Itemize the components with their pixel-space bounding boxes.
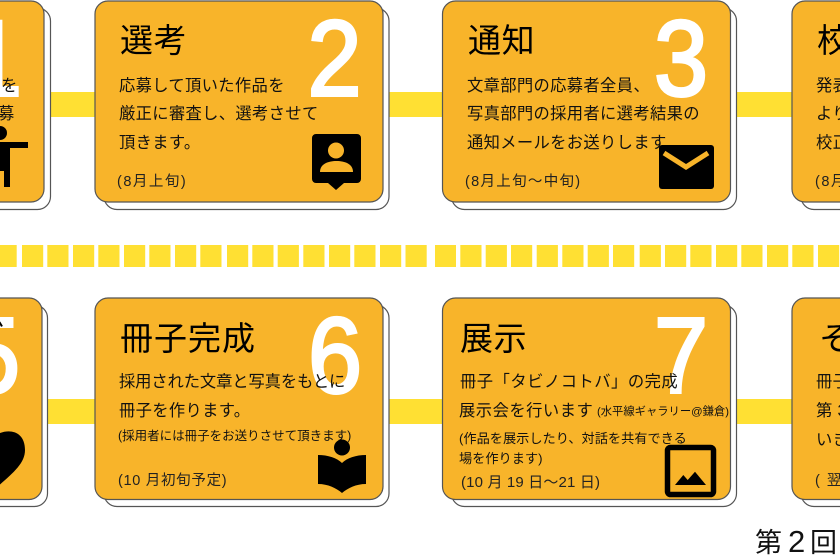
- date: (10 月 19 日〜21 日): [461, 474, 600, 491]
- heading: 冊子完成: [120, 320, 256, 357]
- body text: 文章部門の応募者全員、: [467, 77, 650, 95]
- body text: 採用された文章と写真をもとに: [119, 373, 345, 391]
- number 6: 6: [308, 295, 362, 416]
- body text fragments: を: [1, 77, 18, 95]
- body text: 厳正に審査し、選考させて: [119, 105, 319, 123]
- icon: heart: [0, 431, 25, 490]
- panel: step 3 notification: [442, 0, 736, 210]
- panel: step 2 selection: [95, 0, 389, 210]
- body text: 頂きます。: [119, 134, 201, 152]
- venue note: (水平線ギャラリー@鎌倉): [597, 404, 729, 418]
- note: (採用者には冊子をお送りさせて頂きます): [118, 428, 351, 443]
- body text: 写真部門の採用者に選考結果の: [467, 105, 700, 123]
- body text: 応募して頂いた作品を: [119, 77, 285, 95]
- body text: 通知メールをお送りします: [467, 134, 667, 152]
- note: [459, 431, 687, 466]
- panel: step 7 exhibition: [442, 295, 736, 506]
- panel: step 4 (cropped): [792, 1, 840, 210]
- panel: step 6 booklet complete: [95, 295, 389, 506]
- body text: [459, 373, 678, 420]
- icon: book reader: [318, 440, 366, 493]
- date: (8月上旬): [117, 173, 187, 190]
- body text: 冊子を作ります。: [119, 402, 250, 420]
- icon: person at desk: [0, 126, 28, 187]
- date: (10 月初旬予定): [118, 472, 227, 489]
- dashed divider: [0, 245, 839, 267]
- connector band: top row: [0, 92, 840, 117]
- body text: [119, 77, 319, 152]
- number 7: 7: [654, 295, 708, 416]
- note: (作品を展示したり、対話を共有できる: [459, 431, 687, 446]
- panel: step 1 (cropped): [0, 0, 50, 210]
- body text: [119, 373, 345, 420]
- body text: [816, 373, 840, 449]
- icon: person badge: [312, 134, 361, 190]
- body text: [816, 77, 840, 152]
- connector band: bottom row: [0, 399, 840, 424]
- footer label: 回: [810, 528, 837, 558]
- icon: picture frame: [668, 448, 714, 494]
- footer label: 2: [788, 524, 805, 559]
- body text: [467, 77, 700, 152]
- body text: 冊子「タビノコトバ」の完成: [460, 373, 678, 391]
- panel: step 8 (cropped): [792, 298, 840, 506]
- note: 場を作ります): [459, 451, 543, 466]
- panel: step 5 (cropped): [0, 295, 48, 506]
- number 2: 2: [308, 0, 362, 119]
- icon: envelope: [659, 145, 714, 189]
- heading: 選考: [120, 22, 187, 59]
- heading: 通知: [468, 22, 535, 59]
- heading: 展示: [460, 320, 527, 357]
- footer label: 第: [755, 528, 782, 558]
- date: (8月上旬〜中旬): [465, 173, 581, 190]
- number 3: 3: [654, 0, 708, 119]
- body text: 展示会を行います: [459, 402, 593, 420]
